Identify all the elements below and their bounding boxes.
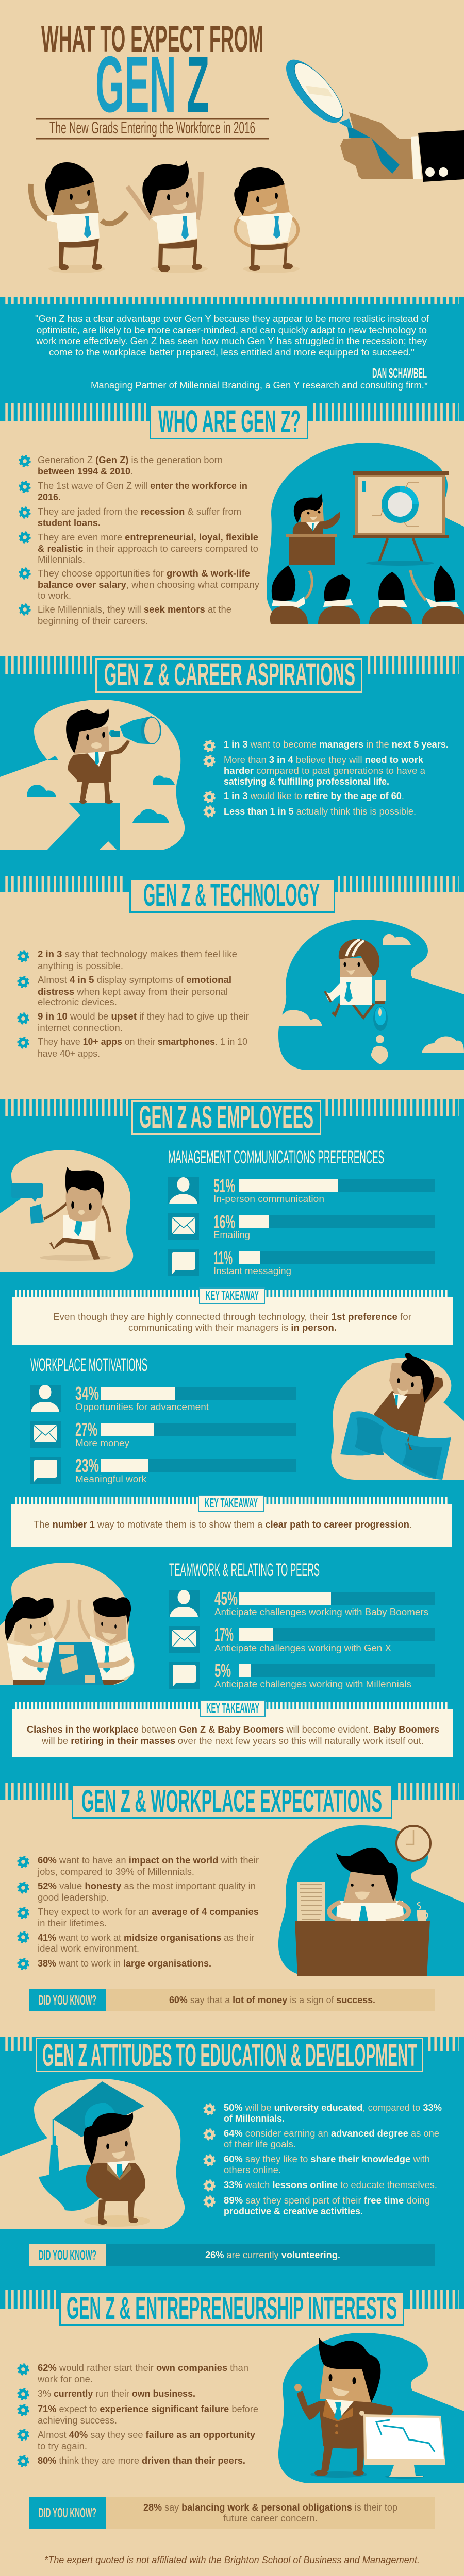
callout: key takeaway three (12, 1700, 453, 1757)
quote text: work more effectively. Gen Z has seen how much Gen Y has struggled in the recession; they (36, 336, 427, 346)
bullets: who are Gen Z: Millennials. (38, 554, 85, 565)
bullets: career aspirations: harder compared to past generations to have a (224, 766, 426, 776)
bar row: baby boomers: Anticipate challenges working with Baby Boomers (214, 1607, 428, 1617)
icon: hand with magnifying glass (277, 51, 464, 182)
bullets: career aspirations: satisfying & fulfilling professional life. (224, 776, 389, 787)
quote attribution: Managing Partner of Millennial Branding, a Gen Y research and consulting firm.* (91, 380, 428, 391)
bullets: workplace expectations: jobs, compared to 39% of Millennials. (37, 1867, 194, 1877)
heading: employees (132, 1099, 321, 1134)
panel: education and development (0, 2037, 464, 2309)
callout: did you know one (29, 1989, 435, 2011)
bullets: entrepreneurship (18, 2363, 258, 2466)
bar row: emailing: Emailing (213, 1230, 250, 1240)
callout: key takeaway one: KEY TAKEAWAY (206, 1287, 259, 1303)
chart: workplace motivations: WORKPLACE MOTIVATIONS (30, 1355, 147, 1375)
bar row: money: More money (75, 1438, 129, 1448)
bullets: career aspirations: 1 in 3 would like to retire by the age of 60. (224, 791, 404, 801)
heading: technology (130, 877, 334, 912)
quote text: optimistic, are likely to be more career-minded, and can quickly adapt to new technology to (37, 325, 427, 335)
callout: key takeaway one: Even though they are highly connected through technology, their 1st preference for (53, 1312, 411, 1322)
callout: did you know three (29, 2497, 435, 2529)
callout: did you know three: future career concern. (223, 2513, 318, 2523)
bullets: who are Gen Z: They are even more entrepreneurial, loyal, flexible (38, 532, 258, 543)
bar row: baby boomers: 45% (214, 1588, 238, 1609)
bar row: meaningful work: 23% (75, 1455, 99, 1476)
bullets: who are Gen Z: 2016. (38, 492, 61, 502)
bullets: who are Gen Z: between 1994 & 2010. (38, 466, 133, 477)
heading: who are Gen Z: WHO ARE GEN Z? (158, 404, 301, 439)
bullets: workplace expectations: 60% want to have an impact on the world with their (38, 1855, 259, 1866)
bullets: entrepreneurship: achieving success. (38, 2415, 117, 2426)
bar row: emailing (168, 1211, 435, 1240)
callout: key takeaway three: will be retiring in their masses over the next few years so this will naturally work itself out. (41, 1736, 424, 1746)
illustration: presenter with audience (267, 443, 464, 624)
callout: did you know one: DID YOU KNOW? (39, 1992, 96, 2008)
quote text (35, 314, 429, 358)
bullets: who are Gen Z: & realistic in their approach to careers compared to (38, 544, 258, 554)
bullets: career aspirations: Less than 1 in 5 actually think this is possible. (224, 806, 416, 817)
callout: did you know one: 60% say that a lot of money is a sign of success. (169, 1995, 375, 2005)
bullets: technology: They have 10+ apps on their smartphones. 1 in 10 (38, 1037, 247, 1047)
bullets: workplace expectations: They expect to work for an average of 4 companies (38, 1907, 259, 1917)
quote text: "Gen Z has a clear advantage over Gen Y because they appear to be more realistic instead of (35, 314, 429, 324)
callout: key takeaway two (11, 1495, 452, 1547)
bullets: technology (18, 949, 249, 1059)
bullets: education and development: 33% watch lessons online to educate themselves. (224, 2180, 437, 2190)
bullets: entrepreneurship: 3% currently run their own business. (38, 2388, 195, 2399)
bar row: millennials (169, 1660, 435, 1689)
bullets: workplace expectations: 52% value honesty as the most important quality in (38, 1881, 256, 1891)
quote attribution (91, 365, 428, 391)
illustration: jetpack man (278, 920, 464, 1070)
bullets: education and development: others online. (224, 2165, 281, 2175)
bullets: who are Gen Z: beginning of their careers. (38, 616, 148, 626)
bar row: money: 27% (75, 1419, 97, 1440)
bullets: education and development (204, 2103, 442, 2216)
bar row: in-person: In-person communication (213, 1194, 324, 1204)
chart: workplace motivations (30, 1355, 296, 1484)
panel: career aspirations (0, 656, 464, 892)
bullets: technology: distress when kept away from their personal (38, 987, 228, 997)
bullets: education and development: of their life goals. (224, 2139, 296, 2149)
bar row: baby boomers (169, 1588, 435, 1617)
bar row: Gen X: 17% (214, 1624, 234, 1645)
bar row: advancement: 34% (75, 1383, 99, 1404)
bullets: entrepreneurship: 62% would rather start their own companies than (38, 2363, 248, 2373)
bar row: meaningful work (30, 1455, 296, 1484)
bullets: technology: have 40+ apps. (38, 1048, 100, 1059)
bar row: millennials: Anticipate challenges working with Millennials (214, 1679, 411, 1689)
bar row: instant messaging (168, 1247, 435, 1276)
bullets: education and development: of Millennials. (224, 2113, 285, 2124)
bullets: education and development: 64% consider earning an advanced degree as one (224, 2128, 439, 2139)
callout: key takeaway three: KEY TAKEAWAY (206, 1700, 259, 1716)
bullets: entrepreneurship: to try again. (38, 2441, 87, 2451)
illustration: man with telescope (0, 700, 185, 850)
illustration: graduate (0, 2079, 185, 2229)
bullets: education and development: 60% say they like to share their knowledge with (224, 2154, 430, 2164)
bullets: who are Gen Z (20, 455, 259, 626)
title Gen Z: GEN Z (95, 40, 209, 129)
subtitle: The New Grads Entering the Workforce in 2016 (49, 118, 255, 137)
bullets: education and development: 89% say they spend part of their free time doing (224, 2195, 430, 2206)
chart: teamwork and relating to peers (169, 1560, 435, 1689)
bullets: technology: electronic devices. (38, 997, 117, 1007)
bullets: who are Gen Z: student loans. (38, 518, 101, 528)
bar row: advancement (30, 1383, 296, 1412)
callout: key takeaway three: Clashes in the workplace between Gen Z & Baby Boomers will become evident. Baby Boomers (27, 1724, 439, 1735)
bullets: entrepreneurship: work for one. (37, 2374, 93, 2384)
bullets: technology: 9 in 10 would be upset if they had to give up their (38, 1011, 249, 1022)
bullets: who are Gen Z: They choose opportunities for growth & work-life (38, 568, 250, 579)
heading: career aspirations (96, 657, 362, 692)
bar row: in-person (168, 1175, 435, 1204)
heading: who are Gen Z (151, 404, 307, 439)
bullets: career aspirations (204, 739, 449, 817)
bullets: technology: internet connection. (38, 1023, 123, 1033)
quote text: come to the workplace better prepared, less entitled and more equipped to succeed." (49, 347, 415, 358)
bullets: workplace expectations: 41% want to work at midsize organisations as their (38, 1933, 254, 1943)
bar row: Gen X: Anticipate challenges working with Gen X (214, 1643, 391, 1653)
bullets: career aspirations: 1 in 3 want to become managers in the next 5 years. (224, 739, 449, 750)
callout: did you know three: 28% say balancing work & personal obligations is their top (143, 2502, 397, 2513)
callout: did you know two (29, 2244, 435, 2266)
bullets: who are Gen Z: to work. (38, 590, 71, 601)
bullets: who are Gen Z: Like Millennials, they will seek mentors at the (38, 604, 231, 615)
bar row: instant messaging: Instant messaging (213, 1266, 291, 1276)
bar row: money (30, 1419, 296, 1448)
callout: did you know three: DID YOU KNOW? (39, 2505, 96, 2520)
header panel (31, 19, 464, 273)
character: man two (127, 160, 208, 273)
bullets: workplace expectations: ideal work environment. (38, 1943, 139, 1954)
callout: key takeaway two: The number 1 way to motivate them is to show them a clear path to career progression. (34, 1519, 412, 1530)
illustration: high five at table (0, 1563, 135, 1685)
bullets: who are Gen Z: balance over salary , when choosing what company (38, 580, 259, 590)
bullets: entrepreneurship: Almost 40% say they see failure as an opportunity (38, 2430, 255, 2440)
panel: Gen Z as employees (0, 1099, 464, 1800)
illustration: man at desk (278, 1825, 464, 1976)
callout: key takeaway one: communicating with their managers is in person. (128, 1323, 337, 1333)
callout: did you know two: DID YOU KNOW? (39, 2247, 96, 2263)
illustration: man with phone (0, 1150, 133, 1272)
footnote: *The expert quoted is not affiliated with the Brighton School of Business and Management. (44, 2555, 420, 2565)
bar row: emailing: 16% (213, 1211, 235, 1232)
callout: key takeaway one (12, 1287, 453, 1345)
bar row: advancement: Opportunities for advancement (75, 1402, 209, 1412)
callout: key takeaway two: KEY TAKEAWAY (205, 1495, 258, 1511)
illustration: man with chart board (278, 2333, 464, 2483)
bar row: Gen X (169, 1624, 435, 1653)
bar row: millennials: 5% (214, 1660, 231, 1681)
bullets: who are Gen Z: They are jaded from the recession & suffer from (38, 506, 241, 517)
bullets: technology: 2 in 3 say that technology makes them feel like (38, 949, 237, 959)
bullets: workplace expectations: good leadership. (38, 1892, 109, 1903)
bar row: instant messaging: 11% (213, 1247, 233, 1268)
bullets: technology: Almost 4 in 5 display symptoms of emotional (38, 975, 231, 985)
chart: management communications preferences (168, 1147, 435, 1276)
bullets: entrepreneurship: 71% expect to experience significant failure before (38, 2404, 258, 2414)
bullets: education and development: 50% will be university educated, compared to 33% (224, 2103, 442, 2113)
bullets: workplace expectations: 38% want to work in large organisations. (38, 1958, 211, 1969)
bullets: education and development: productive & creative activities. (224, 2206, 363, 2216)
illustration: man on banknote (331, 1353, 464, 1480)
bar row: meaningful work: Meaningful work (75, 1474, 147, 1484)
bullets: entrepreneurship: 80% think they are more driven than their peers. (38, 2455, 245, 2466)
bullets: workplace expectations (18, 1855, 259, 1969)
bullets: technology: anything is possible. (38, 961, 123, 971)
bullets: career aspirations: More than 3 in 4 believe they will need to work (224, 755, 424, 765)
callout: did you know two: 26% are currently volunteering. (205, 2250, 340, 2260)
character: man one (31, 162, 127, 273)
bullets: who are Gen Z: The 1st wave of Gen Z will enter the workforce in (38, 481, 247, 491)
bullets: who are Gen Z: Generation Z (Gen Z) is the generation born (38, 455, 223, 465)
panel: expert quote (0, 297, 464, 421)
bar row: in-person: 51% (213, 1175, 235, 1196)
character: man three (234, 167, 300, 273)
bullets: workplace expectations: in their lifetimes. (38, 1918, 107, 1928)
